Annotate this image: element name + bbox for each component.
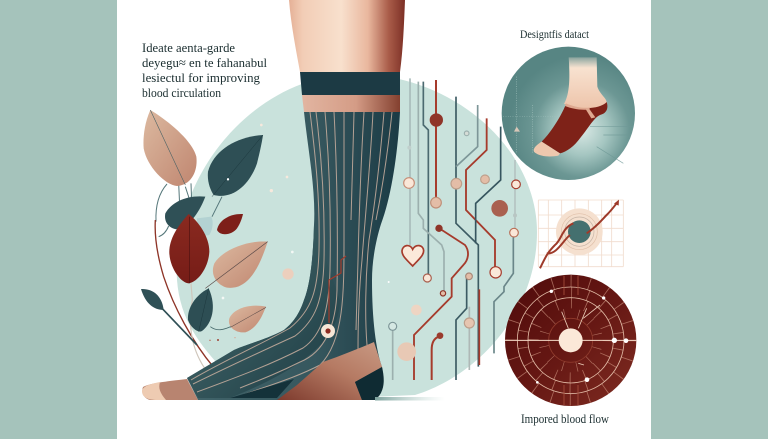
leaf: tan small [229, 306, 266, 332]
trend arrowhead [614, 200, 619, 206]
circuit lines panel [388, 78, 520, 380]
dots: upper [260, 124, 288, 192]
red short curve [414, 228, 468, 380]
line chart on grid [538, 200, 623, 268]
heel panel [277, 342, 382, 400]
lower leaves and stems [141, 214, 294, 372]
caption: top right: Designtfis datact [520, 27, 590, 41]
radial wheel chart [505, 275, 636, 406]
leaf: dark small left [141, 289, 164, 310]
arrow marker [514, 127, 520, 132]
leaf: dark large [208, 135, 263, 197]
grey line branch [418, 82, 444, 293]
ankle [564, 57, 607, 110]
grey lower [467, 307, 472, 370]
sole dark [230, 379, 294, 398]
caption: improved blood flow: Impored blood flow [521, 412, 609, 426]
right grey line [512, 160, 517, 233]
dark vertical central [456, 97, 478, 367]
lower-left grey [390, 330, 395, 380]
foot shading [187, 225, 340, 398]
title text: lesiectul for improving [142, 70, 260, 85]
dark branch right [476, 127, 501, 243]
title text: deyegu≈ en te fahanabul [142, 55, 267, 70]
dots on circle [209, 251, 294, 341]
title text: blood circulation [142, 85, 221, 100]
centre disc [559, 328, 583, 352]
upper stems [156, 183, 222, 222]
dark cuff band [300, 72, 400, 95]
leg skin [289, 0, 405, 72]
icon: heart [402, 246, 424, 266]
data points [536, 290, 628, 384]
data dots [503, 77, 633, 163]
sock top trim [565, 103, 590, 110]
rings [505, 276, 636, 405]
tan cuff band [302, 95, 400, 112]
dark teal line [423, 82, 428, 278]
red line with nodes [433, 80, 439, 203]
toe cap [534, 142, 560, 157]
concentric target [556, 208, 603, 255]
sock body [187, 112, 400, 400]
red central curve [466, 118, 495, 272]
left side band [0, 0, 117, 439]
red sock [542, 102, 607, 153]
nodes [388, 113, 520, 361]
toe panel [142, 379, 198, 400]
title text: Ideate aenta-garde [142, 40, 235, 55]
heel dark tip [355, 367, 384, 400]
large mint circle [177, 74, 537, 400]
inset panel: sock on foot [502, 47, 635, 180]
leaf: dark lower [188, 288, 213, 332]
rib lines [191, 112, 392, 396]
red vein line [329, 256, 346, 323]
sock band [585, 108, 595, 118]
trend line [540, 202, 617, 268]
toe tip [142, 382, 166, 400]
dark lower branch [456, 277, 467, 380]
grid [538, 200, 623, 267]
upper leaves [143, 110, 288, 235]
leaf: pale behind [197, 217, 213, 235]
leaf: red large [169, 214, 209, 283]
leaf: tan large [143, 110, 197, 186]
floor shadow [375, 397, 445, 400]
leaf: tan middle [205, 241, 268, 288]
stems [155, 220, 232, 372]
leaf: dark small upper [165, 196, 205, 229]
red lower segment [477, 289, 482, 365]
red lower stem [432, 336, 440, 380]
leaf: red small [217, 214, 243, 234]
grey line with heart [407, 78, 412, 245]
grey branch [456, 105, 478, 167]
ankle marker [321, 324, 335, 338]
sock [142, 72, 445, 400]
title text [142, 40, 267, 100]
right side band [651, 0, 768, 439]
spokes [511, 281, 630, 400]
